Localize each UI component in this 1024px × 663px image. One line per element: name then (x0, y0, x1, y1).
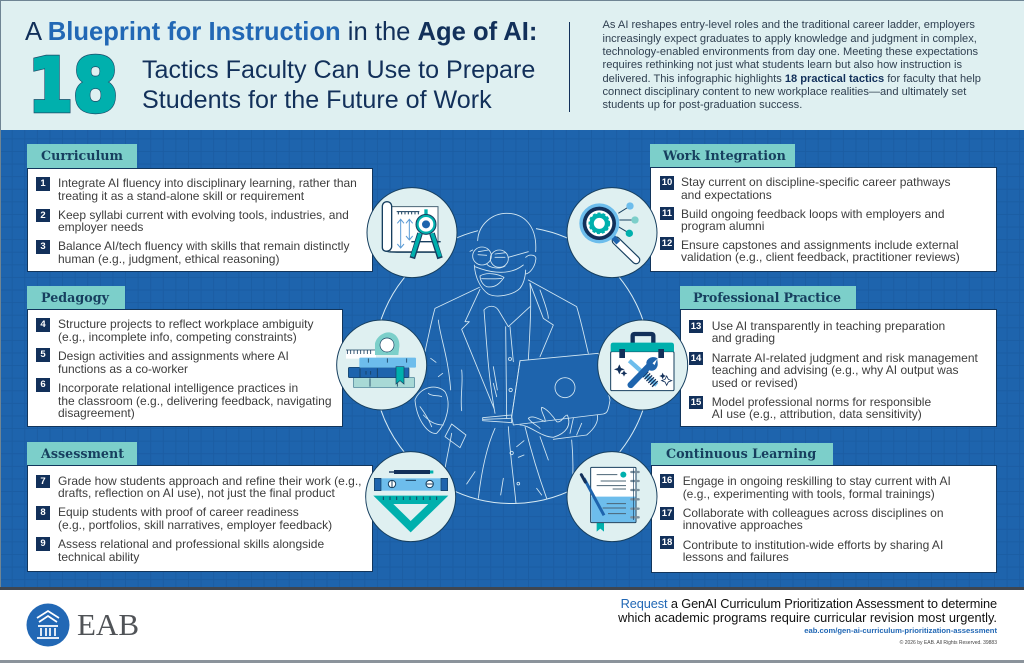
call to action: Request a GenAI Curriculum Prioritization Assessment to determine (621, 596, 997, 611)
heading: work integration (650, 144, 795, 168)
heading: professional practice: Professional Practice (693, 290, 841, 305)
panel: professional practice (680, 286, 997, 427)
tactic 14: Narrate AI-related judgment and risk management (712, 351, 978, 365)
tactic 10: 10 (662, 177, 672, 188)
panel: pedagogy (27, 286, 343, 427)
tactic 16 (660, 474, 951, 501)
tactic 17 (660, 506, 944, 532)
tactic 14: 14 (691, 353, 701, 364)
tactic 11: program alumni (681, 219, 764, 233)
intro paragraph: increasingly expect graduates to apply knowledge and judgment in complex, (602, 33, 977, 45)
tactic 17: 17 (662, 508, 672, 519)
heading: assessment: Assessment (41, 446, 124, 461)
tactic 7: drafts, reflection on AI use), not just the final product (58, 486, 335, 500)
tactic 5: 5 (40, 349, 46, 360)
tactic 2: Keep syllabi current with evolving tools, industries, and (58, 208, 349, 222)
subtitle: Tactics Faculty Can Use to Prepare (142, 56, 535, 84)
blueprint background (0, 130, 1024, 587)
intro paragraph: students up for post-graduation success. (602, 99, 802, 111)
tactic 9: technical ability (58, 550, 139, 564)
tactic 6: the classroom (e.g., delivering feedback, navigating (58, 394, 332, 408)
EAB logo: EAB (77, 607, 139, 642)
tactic 6 (36, 378, 332, 420)
subtitle: Students for the Future of Work (142, 86, 492, 114)
tactic 7: 7 (40, 476, 46, 487)
heading: curriculum (27, 144, 137, 168)
tactic 14: used or revised) (712, 376, 798, 390)
tactic 4: Structure projects to reflect workplace ambiguity (58, 317, 313, 331)
tactic 11 (660, 207, 945, 233)
tactic 18: Contribute to institution-wide efforts by sharing AI (683, 538, 943, 552)
tactic 2: 2 (40, 210, 46, 221)
icon: magnifier and gear (567, 188, 657, 278)
icon: notebook and pen (567, 452, 657, 542)
tactic 6: disagreement) (58, 406, 135, 420)
tactic 1 (36, 176, 357, 203)
tactic 12 (660, 237, 960, 264)
tactic 2 (36, 208, 349, 234)
tactic 15: AI use (e.g., attribution, data sensitivity) (712, 407, 922, 421)
tactic 18: lessons and failures (683, 550, 789, 564)
tactic 15: 15 (691, 397, 701, 408)
icon: level and set square (366, 452, 456, 542)
tactic 12: Ensure capstones and assignments include external (681, 238, 958, 252)
intro paragraph: As AI reshapes entry-level roles and the traditional career ladder, employers (602, 19, 975, 31)
subtitle (142, 56, 535, 114)
call to action (618, 596, 997, 625)
tactic 3: Balance AI/tech fluency with skills that remain distinctly (58, 239, 349, 253)
intro paragraph: delivered. This infographic highlights 18 practical tactics for faculty that help (602, 73, 981, 85)
heading: professional practice (680, 286, 856, 310)
url: eab.com/gen-ai-curriculum-prioritization-assessment (804, 626, 997, 635)
icon: tape measure and books (337, 320, 427, 410)
heading: work integration: Work Integration (663, 148, 786, 163)
tactic 15 (689, 395, 931, 421)
tactic 13: 13 (691, 321, 701, 332)
tactic 9: Assess relational and professional skills alongside (58, 537, 324, 551)
EAB logo (26, 604, 139, 646)
large ring (373, 229, 650, 503)
panel: continuous learning (651, 443, 997, 573)
tactic 9: 9 (40, 538, 46, 549)
tactic 16: 16 (662, 475, 672, 486)
intro paragraph (602, 19, 981, 111)
tactic 12: validation (e.g., client feedback, practitioner reviews) (681, 250, 960, 264)
tactic 15: Model professional norms for responsible (712, 395, 931, 409)
icon: toolbox (598, 320, 688, 410)
tactic 6: Incorporate relational intelligence practices in (58, 381, 298, 395)
footer band (0, 587, 1024, 663)
intro paragraph: connect disciplinary content to new workplace realities—and ultimately set (602, 86, 966, 98)
tactic 18: 18 (662, 537, 672, 548)
tactic 5 (36, 348, 289, 376)
tactic 13 (689, 319, 945, 345)
tactic 1: 1 (40, 178, 46, 189)
title line: A Blueprint for Instruction in the Age of AI: (25, 18, 537, 46)
tactic 3: human (e.g., judgment, ethical reasoning) (58, 252, 279, 266)
tactic 8: 8 (40, 507, 46, 518)
tactic 13: Use AI transparently in teaching preparation (712, 319, 945, 333)
heading: pedagogy (27, 286, 125, 310)
tactic 8 (36, 505, 332, 532)
tactic 4 (36, 317, 314, 344)
tactic 1: Integrate AI fluency into disciplinary learning, rather than (58, 176, 357, 190)
heading: assessment (27, 442, 137, 465)
intro paragraph: technology-enabled environments from day one. Meeting these expectations (602, 46, 978, 58)
tactic 17: Collaborate with colleagues across disciplines on (683, 506, 944, 520)
tactic 5: Design activities and assignments where AI (58, 349, 289, 363)
tactic 8: Equip students with proof of career readiness (58, 505, 299, 519)
heading: curriculum: Curriculum (41, 148, 123, 163)
panel: assessment (27, 442, 373, 572)
tactic 10 (660, 175, 950, 202)
tactic 3: 3 (40, 241, 46, 252)
panel: work integration (650, 144, 997, 272)
tactic 4: 4 (40, 319, 46, 330)
tactic 11: 11 (662, 208, 672, 219)
tactic 17: innovative approaches (683, 518, 803, 532)
tactic 1: treating it as a stand-alone skill or requirement (58, 189, 304, 203)
copyright: © 2026 by EAB. All Rights Reserved. 39883 (900, 640, 997, 646)
tactic 3 (36, 239, 350, 266)
tactic 5: functions as a co-worker (58, 362, 188, 376)
tactic 16: (e.g., experimenting with tools, formal trainings) (683, 487, 935, 501)
tactic 6: 6 (40, 379, 46, 390)
tactic 8: (e.g., portfolios, skill narratives, employer feedback) (58, 518, 332, 532)
tactic 14 (689, 351, 978, 390)
tactic 16: Engage in ongoing reskilling to stay current with AI (683, 474, 951, 488)
tactic 18 (660, 536, 943, 564)
tactic 12: 12 (662, 238, 672, 249)
heading: continuous learning: Continuous Learning (666, 446, 816, 461)
tactic 2: employer needs (58, 220, 143, 234)
panel: curriculum (27, 144, 373, 272)
tactic 9 (36, 537, 324, 564)
heading: pedagogy: Pedagogy (41, 290, 109, 305)
tactic 4: (e.g., incomplete info, competing constraints) (58, 330, 297, 344)
tactic 7: Grade how students approach and refine their work (e.g., (58, 474, 362, 488)
tactic 11: Build ongoing feedback loops with employers and (681, 207, 945, 221)
tactic 13: and grading (712, 331, 775, 345)
header band (0, 0, 1024, 130)
icon: blueprint and compass (367, 188, 457, 278)
call to action: which academic programs require curricular revision most urgently. (618, 610, 997, 625)
tactic 10: and expectations (681, 188, 772, 202)
tactic 7 (36, 474, 362, 500)
tactic 10: Stay current on discipline-specific career pathways (681, 175, 950, 189)
intro paragraph: requires rethinking not just what students learn but also how instruction is (602, 59, 962, 71)
tactic 14: teaching and advising (e.g., why AI output was (712, 363, 959, 377)
person line drawing (415, 213, 610, 503)
heading: continuous learning (651, 443, 833, 465)
